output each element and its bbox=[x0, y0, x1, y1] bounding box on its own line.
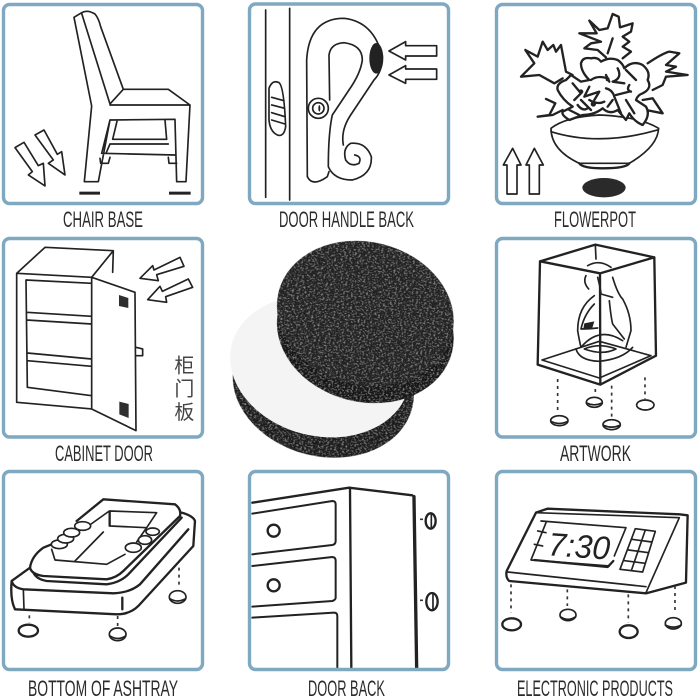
panel: electronic products bbox=[496, 472, 696, 670]
panel: chair base bbox=[4, 4, 202, 204]
panel: door back bbox=[250, 472, 448, 670]
label: door handle back: DOOR HANDLE BACK bbox=[279, 207, 414, 232]
product photo: felt pads bbox=[215, 223, 469, 476]
icon: display case bbox=[538, 245, 656, 430]
icon: digital clock bbox=[502, 509, 688, 638]
icon: ashtray bbox=[11, 499, 195, 641]
chinese label: 板 bbox=[174, 401, 194, 424]
panel: flowerpot bbox=[496, 4, 696, 204]
upper pad bbox=[261, 223, 469, 421]
icon: cabinet back bbox=[252, 488, 438, 668]
label: cabinet door: CABINET DOOR bbox=[55, 441, 153, 466]
panel: artwork bbox=[496, 238, 696, 437]
label: chair base: CHAIR BASE bbox=[63, 207, 143, 232]
icon: door handle bbox=[266, 8, 437, 200]
panel: bottom of ashtray bbox=[4, 472, 202, 670]
icon: flowerpot bbox=[503, 14, 688, 197]
chinese label: 门 bbox=[174, 378, 194, 401]
label: artwork: ARTWORK bbox=[560, 441, 631, 466]
icon: chair bbox=[15, 11, 191, 195]
chinese label: 柜 bbox=[174, 354, 194, 377]
lower pad bbox=[215, 277, 429, 476]
clock digits: 7:30 bbox=[547, 525, 611, 567]
panel: cabinet door bbox=[4, 238, 202, 437]
label: flowerpot: FLOWERPOT bbox=[554, 207, 636, 232]
icon: cabinet bbox=[17, 247, 194, 431]
chinese label bbox=[174, 354, 194, 424]
panel: door handle back bbox=[250, 4, 448, 204]
